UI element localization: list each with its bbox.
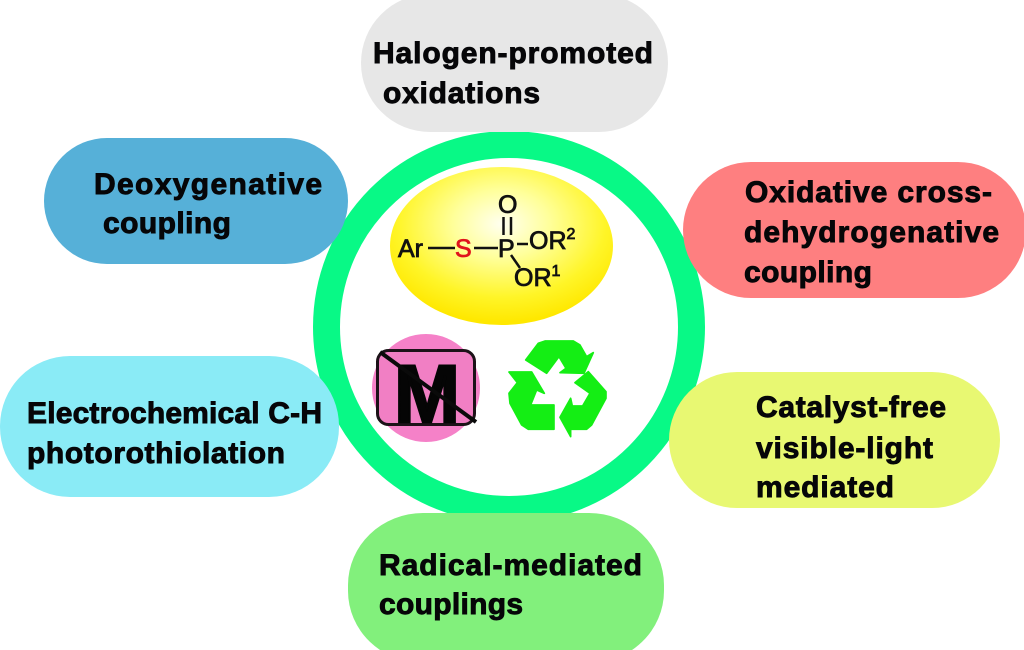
molecule: aryl phosphorothioate on yellow ellipse: OR (529, 227, 566, 255)
pill: halogen-promoted oxidations: oxidations (383, 77, 540, 110)
pill: electrochemical C-H photorothiolation (0, 356, 339, 497)
molecule: aryl phosphorothioate on yellow ellipse: S (455, 235, 472, 263)
molecule: aryl phosphorothioate on yellow ellipse: OR (514, 264, 552, 292)
central green ring (326, 144, 692, 510)
pill: oxidative cross-dehydrogenative coupling: Oxidative cross- (745, 176, 992, 209)
pill: catalyst-free visible-light mediated: visible-light (756, 432, 933, 465)
molecule: aryl phosphorothioate on yellow ellipse: 1 (552, 263, 560, 280)
pill: deoxygenative coupling (44, 138, 348, 264)
pill: catalyst-free visible-light mediated (669, 372, 1000, 508)
pill: oxidative cross-dehydrogenative coupling (683, 162, 1024, 298)
pill: radical-mediated couplings: Radical-mediated (379, 549, 642, 582)
pill: oxidative cross-dehydrogenative coupling: dehydrogenative (744, 216, 999, 249)
pill: deoxygenative coupling: coupling (103, 207, 231, 240)
molecule: aryl phosphorothioate on yellow ellipse: O (498, 191, 517, 219)
pill: halogen-promoted oxidations (361, 0, 668, 132)
molecule: aryl phosphorothioate on yellow ellipse (390, 167, 613, 325)
pill: radical-mediated couplings: couplings (379, 588, 523, 621)
molecule: aryl phosphorothioate on yellow ellipse: P (498, 235, 515, 263)
pill: catalyst-free visible-light mediated: Catalyst-free (756, 391, 946, 424)
pill: oxidative cross-dehydrogenative coupling: coupling (744, 256, 872, 289)
pill: halogen-promoted oxidations: Halogen-promoted (373, 37, 653, 70)
molecule: aryl phosphorothioate on yellow ellipse: Ar (398, 235, 423, 263)
pill: deoxygenative coupling: Deoxygenative (94, 168, 322, 201)
icon: green recycle symbol (509, 341, 606, 437)
pill: electrochemical C-H photorothiolation: photorothiolation (27, 437, 285, 470)
molecule: aryl phosphorothioate on yellow ellipse: 2 (566, 226, 576, 243)
pill: radical-mediated couplings (348, 513, 664, 650)
pill: catalyst-free visible-light mediated: mediated (756, 471, 894, 504)
icon: no metal: M (394, 349, 460, 440)
icon: no metal (372, 334, 480, 442)
pill: electrochemical C-H photorothiolation: Electrochemical C-H (27, 397, 322, 430)
